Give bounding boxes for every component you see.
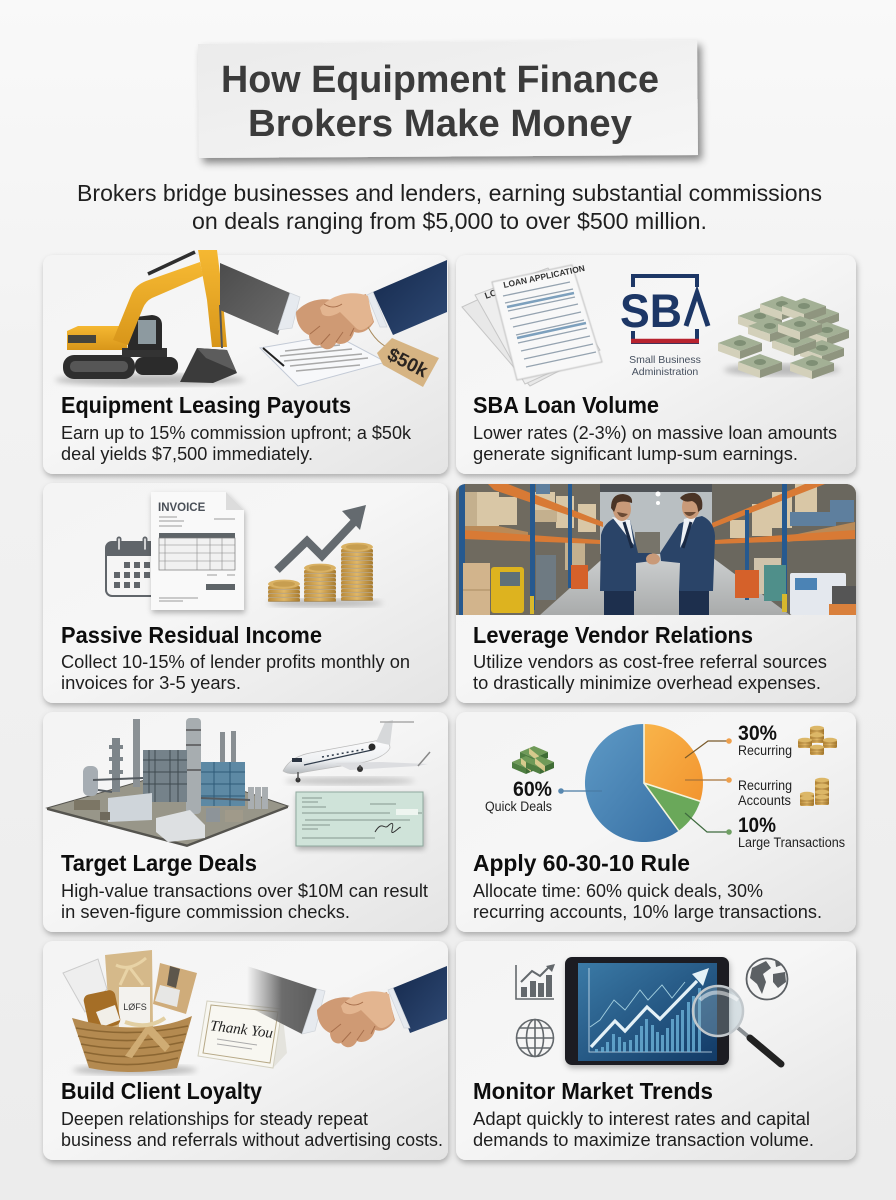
description xyxy=(61,1108,443,1150)
label: 10% large transactions: 10% xyxy=(738,814,776,837)
icon: rising coin stacks xyxy=(267,543,383,607)
icon: SBA logo: Administration xyxy=(632,366,698,378)
pie chart xyxy=(585,724,703,842)
icon: invoice: INVOICE xyxy=(158,502,206,514)
icon: loan application papers: LOAN APPLICATION xyxy=(502,263,586,290)
description: Utilize vendors as cost-free referral sources xyxy=(473,651,827,672)
icon: price tag xyxy=(368,327,439,387)
label: 30% recurring: Recurring xyxy=(738,743,792,758)
icon: tablet with chart xyxy=(565,957,729,1065)
panel: build client loyalty xyxy=(43,941,448,1160)
heading: Apply 60-30-10 Rule xyxy=(473,850,690,876)
label: 10% large transactions xyxy=(738,814,845,850)
icon: loan application papers: LO xyxy=(483,287,498,301)
description: invoices for 3-5 years. xyxy=(61,672,241,693)
heading: Passive Residual Income xyxy=(61,622,322,648)
leader lines xyxy=(558,738,732,835)
icon: coins middle xyxy=(800,778,829,806)
icon: commission check xyxy=(296,792,423,846)
description: Deepen relationships for steady repeat xyxy=(61,1108,368,1129)
man right xyxy=(660,493,715,615)
description xyxy=(61,422,412,464)
icon: private jet xyxy=(283,720,430,785)
label: 30% recurring xyxy=(738,722,792,758)
description: Allocate time: 60% quick deals, 30% xyxy=(473,880,763,901)
icon: handshake xyxy=(247,966,447,1047)
description: generate significant lump-sum earnings. xyxy=(473,443,798,464)
icon: handshake xyxy=(220,260,447,349)
icon: magnifying glass xyxy=(693,986,781,1064)
description xyxy=(61,880,428,922)
label: 60% quick deals: Quick Deals xyxy=(485,799,552,814)
icon: SBA logo: SB xyxy=(620,284,682,337)
description: Adapt quickly to interest rates and capital xyxy=(473,1108,810,1129)
warehouse photo xyxy=(456,484,856,615)
icon: growth arrow xyxy=(277,505,366,570)
subtitle xyxy=(77,180,822,234)
icon: bar chart xyxy=(516,964,555,999)
subtitle: Brokers bridge businesses and lenders, earning substantial commissions xyxy=(77,180,822,206)
label: recurring accounts xyxy=(738,778,792,808)
heading: Leverage Vendor Relations xyxy=(473,622,753,648)
description: Lower rates (2-3%) on massive loan amounts xyxy=(473,422,837,443)
description xyxy=(473,651,827,693)
heading: Monitor Market Trends xyxy=(473,1078,713,1104)
panel: leverage vendor relations xyxy=(456,484,856,703)
bars xyxy=(595,988,701,1052)
man left xyxy=(600,494,652,615)
panel: equipment leasing payouts xyxy=(43,250,448,474)
description xyxy=(473,1108,814,1150)
description: to drastically minimize overhead expenses. xyxy=(473,672,821,693)
icon: SBA logo: Small Business xyxy=(629,354,701,366)
subtitle: on deals ranging from $5,000 to over $500 million. xyxy=(192,208,707,234)
heading: Equipment Leasing Payouts xyxy=(61,392,351,418)
panel: SBA loan volume xyxy=(456,255,856,474)
icon: price tag: $50k xyxy=(384,344,431,382)
icon: invoice xyxy=(151,492,244,610)
heading: SBA Loan Volume xyxy=(473,392,659,418)
panel: monitor market trends xyxy=(456,941,856,1160)
label: 60% quick deals: 60% xyxy=(513,778,552,801)
icon: refinery xyxy=(47,718,288,847)
description: recurring accounts, 10% large transactions. xyxy=(473,901,822,922)
description: High-value transactions over $10M can result xyxy=(61,880,428,901)
description xyxy=(61,651,410,693)
icon: excavator xyxy=(55,250,245,386)
icon: coins top xyxy=(798,726,837,755)
description: deal yields $7,500 immediately. xyxy=(61,443,313,464)
icon: gift basket: LØFS xyxy=(123,1002,147,1012)
panel: target large deals xyxy=(43,712,448,932)
icon: money bundle xyxy=(512,746,554,774)
description xyxy=(473,880,822,922)
description: demands to maximize transaction volume. xyxy=(473,1129,814,1150)
icon: thank you card xyxy=(198,1001,287,1068)
description: in seven-figure commission checks. xyxy=(61,901,350,922)
icon: calendar xyxy=(106,539,158,596)
panel: apply 60-30-10 rule xyxy=(456,712,856,932)
icon: contract document xyxy=(260,335,386,386)
icon: loan application papers xyxy=(462,263,602,386)
icon: SBA logo xyxy=(620,276,708,378)
title: How Equipment Finance xyxy=(221,59,659,101)
description: Collect 10-15% of lender profits monthly on xyxy=(61,651,410,672)
label: 30% recurring: 30% xyxy=(738,722,777,745)
icon: thank you card: Thank You xyxy=(209,1018,274,1042)
title: Brokers Make Money xyxy=(248,103,632,145)
label: recurring accounts: Accounts xyxy=(738,793,791,808)
description: business and referrals without advertising costs. xyxy=(61,1129,443,1150)
title xyxy=(198,40,698,158)
panel: passive residual income xyxy=(43,483,448,703)
heading: Target Large Deals xyxy=(61,850,257,876)
label: 60% quick deals xyxy=(485,778,552,814)
icon: gift basket xyxy=(63,950,197,1075)
icon: wire globe xyxy=(516,1020,554,1056)
label: recurring accounts: Recurring xyxy=(738,778,792,793)
description: Earn up to 15% commission upfront; a $50k xyxy=(61,422,412,443)
label: 10% large transactions: Large Transactions xyxy=(738,835,845,850)
description xyxy=(473,422,837,464)
icon: stacks of money xyxy=(718,296,849,379)
heading: Build Client Loyalty xyxy=(61,1078,262,1104)
icon: world globe xyxy=(746,958,788,1000)
